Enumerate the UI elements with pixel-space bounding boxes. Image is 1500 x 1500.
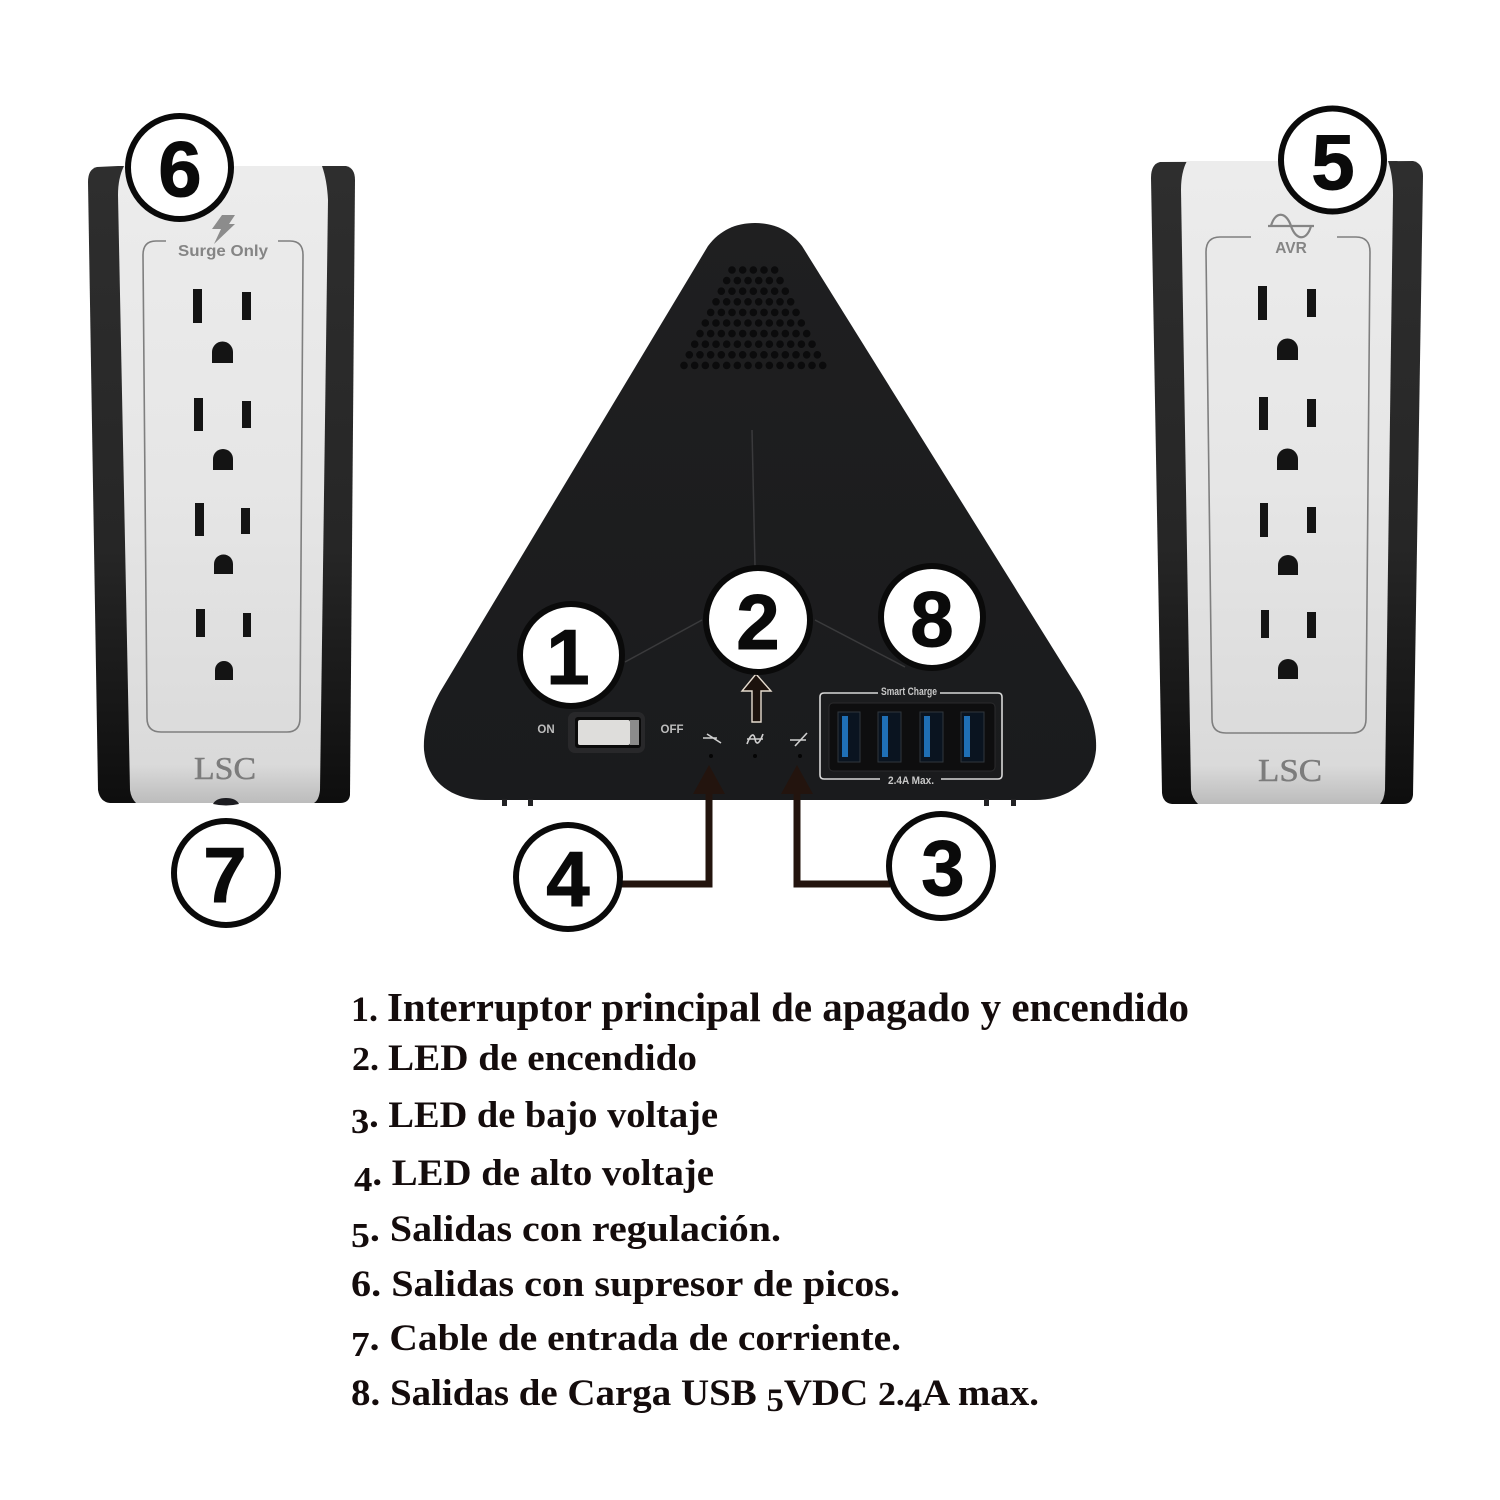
legend item 4: . LED de alto voltaje	[372, 1153, 714, 1194]
left unit white face	[118, 166, 328, 803]
legend item 7: 7	[351, 1325, 370, 1364]
legend item 4: 4	[354, 1160, 372, 1199]
LSC logo right: LSC	[1258, 752, 1322, 788]
power switch	[568, 712, 645, 753]
left surge-only outlet unit	[88, 166, 355, 806]
USB port 1	[838, 712, 860, 762]
arrow: LED power up	[742, 674, 771, 722]
right AVR outlet unit	[1151, 161, 1423, 804]
legend item 3: 3	[351, 1102, 369, 1141]
callout 3	[889, 814, 993, 918]
central triangular unit	[424, 223, 1096, 806]
icon: lightning bolt	[212, 215, 235, 244]
legend item 7: . Cable de entrada de corriente.	[370, 1318, 901, 1359]
right unit white face	[1181, 161, 1393, 804]
callout 5: 5	[1311, 118, 1355, 206]
legend item 3: . LED de bajo voltaje	[369, 1095, 718, 1136]
OFF label: OFF	[660, 724, 684, 736]
legend item 8: 2.	[878, 1376, 905, 1413]
callout 4: 4	[546, 835, 590, 923]
legend item 8: A max.	[922, 1373, 1039, 1414]
USB port 2	[878, 712, 901, 762]
surge only label: Surge Only	[178, 243, 268, 260]
left unit black housing	[88, 166, 355, 803]
max current label: 2.4A Max.	[888, 775, 934, 787]
callout 8	[881, 566, 983, 668]
LED symbols and dots	[703, 733, 807, 758]
speaker vent	[684, 270, 823, 365]
power cable stub	[213, 798, 239, 806]
right unit black housing	[1151, 161, 1423, 804]
legend item 8: 4	[905, 1383, 922, 1419]
legend item 1: 1. Interruptor principal de apagado y encendido	[351, 984, 1189, 1030]
right outlet panel outline	[1206, 237, 1370, 733]
USB port 4	[961, 712, 984, 762]
icon: AVR sine wave	[1268, 215, 1314, 237]
legend item 6: 6. Salidas con supresor de picos.	[351, 1264, 900, 1305]
USB port 3	[920, 712, 943, 762]
legend item 2: 2. LED de encendido	[352, 1038, 697, 1079]
ON label: ON	[537, 724, 555, 736]
callout 2	[706, 568, 810, 672]
callout 6: 6	[158, 125, 202, 213]
legend item 8: 5	[766, 1383, 784, 1419]
callout 8: 8	[910, 575, 954, 663]
feet	[502, 799, 1016, 806]
arrow: callout 4 to high voltage LED	[620, 765, 725, 884]
right outlets	[1258, 286, 1316, 679]
legend item 8: 8. Salidas de Carga USB	[351, 1373, 736, 1414]
callout 7: 7	[203, 831, 247, 919]
legend item 8: VDC	[784, 1373, 878, 1414]
LSC logo left: LSC	[194, 750, 256, 786]
callout 1: 1	[546, 613, 590, 701]
legend item 5: 5	[351, 1216, 370, 1255]
USB charging panel	[820, 686, 1002, 787]
left outlet panel outline	[143, 241, 303, 732]
legend list	[351, 984, 1189, 1419]
callout 5	[1281, 108, 1384, 212]
callout 6	[128, 116, 231, 219]
callout 3: 3	[921, 824, 965, 912]
callout 2: 2	[736, 578, 780, 666]
molded ridge lines	[625, 430, 905, 667]
callout 1	[520, 604, 622, 706]
legend item 5: . Salidas con regulación.	[370, 1209, 781, 1250]
callout 7	[174, 821, 278, 925]
AVR label: AVR	[1275, 240, 1307, 257]
triangle body	[424, 223, 1096, 800]
left outlets	[193, 289, 251, 680]
callout 4	[516, 825, 620, 929]
arrow: callout 3 to low voltage LED	[781, 765, 890, 884]
smart charge label: Smart Charge	[881, 686, 937, 698]
